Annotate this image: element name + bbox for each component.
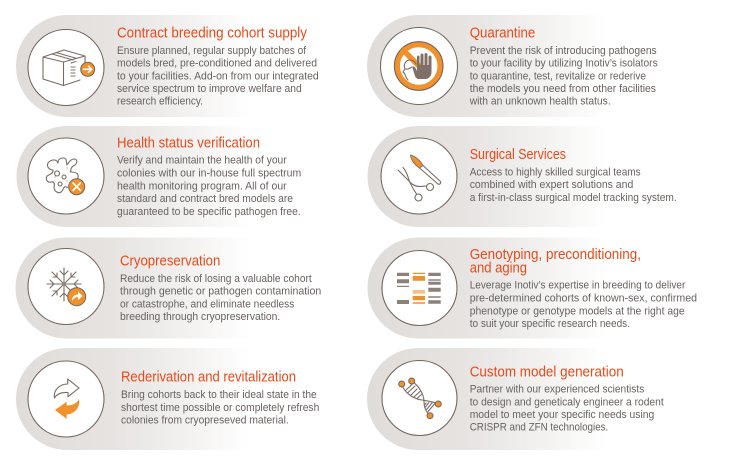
heading: Contract breeding cohort supply [117, 26, 308, 42]
icon: surgical tools [381, 138, 457, 214]
text block: colonies with our in-house full spectrum [117, 168, 301, 180]
panel: quarantine [367, 15, 658, 117]
text block: service spectrum to improve welfare and [117, 83, 302, 95]
heading: Cryopreservation [120, 254, 220, 270]
text block: breeding through cryopreservation. [120, 311, 280, 323]
heading: and aging [470, 261, 527, 277]
pill background [16, 126, 250, 227]
text block: Ensure planned, regular supply batches of [117, 45, 307, 57]
text block: Prevent the risk of introducing pathogens [470, 45, 657, 57]
panel: cryopreservation [15, 238, 321, 338]
heading: Rederivation and revitalization [121, 370, 296, 386]
text block: model to meet your specific needs using [470, 409, 654, 421]
text block: Bring cohorts back to their ideal state in the [121, 389, 317, 401]
text block: shortest time possible or completely refresh [121, 402, 319, 414]
text block: to design and geneticaly engineer a rodent [470, 396, 664, 408]
text block: colonies from cryopreseved material. [121, 415, 289, 427]
pill background [367, 238, 605, 338]
text block: standard and contract bred models are [117, 193, 293, 205]
text block: through genetic or pathogen contamination [120, 286, 321, 298]
icon: DNA helix [382, 360, 457, 436]
text block: phenotype or genotype models at the right age [470, 305, 685, 317]
text block [121, 389, 319, 427]
text block: Leverage Inotiv’s expertise in breeding to deliver [470, 279, 686, 291]
text block [470, 166, 677, 204]
heading [470, 247, 641, 277]
text block: CRISPR and ZFN technologies. [470, 422, 608, 434]
text block: models bred, pre-conditioned and delivered [117, 58, 317, 70]
heading: Quarantine [470, 26, 535, 42]
text block [470, 384, 664, 434]
panel: rederivation and revitalization [16, 348, 319, 450]
pill background [367, 348, 605, 450]
pill background [16, 15, 250, 117]
pill background [367, 15, 605, 117]
heading: Genotyping, preconditioning, [470, 247, 641, 263]
panel: surgical services [367, 126, 677, 227]
text block: Verify and maintain the health of your [117, 155, 287, 167]
text block: a first-in-class surgical model tracking system. [470, 192, 677, 204]
panel: contract breeding cohort supply [16, 15, 319, 117]
text block: to quarantine, test, revitalize or rederive [470, 70, 646, 82]
text block: guaranteed to be specific pathogen free. [117, 206, 301, 218]
icon: snowflake with arrow [28, 248, 104, 324]
pill background [367, 126, 605, 227]
text block: the models you need from other facilities [470, 83, 657, 95]
text block: Access to highly skilled surgical teams [470, 166, 641, 178]
panel: genotyping, preconditioning, and aging [367, 238, 697, 338]
text block: or catastrophe, and eliminate needless [120, 298, 295, 310]
text block: research efficiency. [117, 96, 203, 108]
text block: to suit your specific research needs. [470, 318, 630, 330]
pill background [15, 238, 250, 338]
text block [470, 279, 697, 330]
text block: pre-determined cohorts of known-sex, confirmed [470, 292, 697, 304]
text block: with an unknown health status. [469, 96, 611, 108]
icon: cycle arrows [28, 361, 104, 437]
text block [117, 155, 301, 218]
heading: Health status verification [117, 136, 260, 152]
icon: box with arrow [28, 30, 104, 106]
icon: pathogen with cross [28, 138, 104, 214]
text block: Partner with our experienced scientists [470, 384, 645, 396]
panel: health status verification [16, 126, 301, 227]
text block: to your facilities. Add-on from our integrated [117, 70, 319, 82]
text block: to your facility by utilizing Inotiv’s isolators [470, 58, 658, 70]
text block: combined with expert solutions and [470, 179, 633, 191]
text block: Reduce the risk of losing a valuable cohort [120, 273, 312, 285]
text block [469, 45, 658, 108]
text block: health monitoring program. All of our [117, 180, 287, 192]
panel: custom model generation [367, 348, 664, 450]
heading: Custom model generation [470, 364, 624, 380]
heading: Surgical Services [470, 147, 566, 163]
icon: no entry hand [380, 28, 458, 104]
pill background [16, 348, 250, 450]
text block [117, 45, 319, 108]
text block [120, 273, 321, 323]
icon: gel bands [382, 250, 457, 326]
